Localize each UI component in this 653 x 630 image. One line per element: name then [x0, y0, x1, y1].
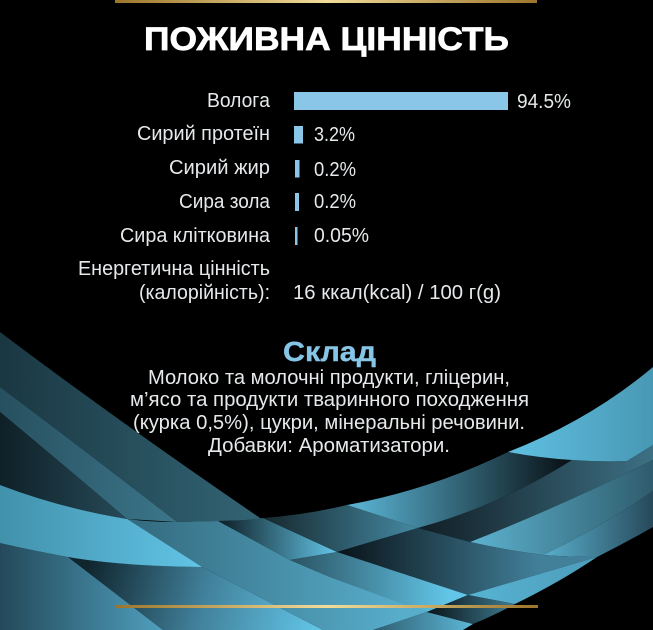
row: crude ash [179, 191, 356, 213]
composition text [130, 367, 529, 457]
row: crude ash: 0.2% [314, 191, 356, 213]
row: energy value: Енергетична цінність [78, 258, 270, 280]
row: crude fat: 0.2% [314, 159, 356, 181]
title: ПОЖИВНА ЦІННІСТЬ [144, 21, 509, 57]
row: crude fat [169, 157, 356, 181]
bottom gold bar [116, 605, 538, 608]
composition text: Молоко та молочні продукти, гліцерин, [148, 367, 510, 389]
row: moisture [207, 90, 571, 113]
row: moisture: Вологa [207, 90, 271, 112]
top gold bar [115, 0, 537, 3]
row: energy value [78, 258, 501, 304]
row: crude protein: 3.2% [314, 124, 355, 146]
row: crude protein [137, 123, 355, 146]
row: crude protein: Сирий протеїн [137, 123, 270, 145]
row: crude fibre: 0.05% [314, 225, 369, 247]
nutrition bar chart [78, 90, 571, 304]
row: crude ash: Сира зола [179, 191, 271, 213]
row: energy value: 16 ккал(kcal) / 100 г(g) [293, 282, 501, 304]
row: crude fat: Сирий жир [169, 157, 270, 179]
composition text: Добавки: Ароматизатори. [208, 435, 450, 457]
composition text: (курка 0,5%), цукри, мінеральні речовини. [133, 412, 525, 434]
composition text: м’ясо та продукти тваринного походження [130, 389, 529, 411]
row: energy value: (калорійність): [139, 282, 270, 304]
decorative ribbons [0, 332, 653, 630]
row: crude fibre: Сира клітковина [120, 225, 271, 247]
composition heading: Склад [283, 336, 376, 367]
row: moisture: 94.5% [517, 91, 571, 113]
row: crude fibre [120, 225, 369, 247]
